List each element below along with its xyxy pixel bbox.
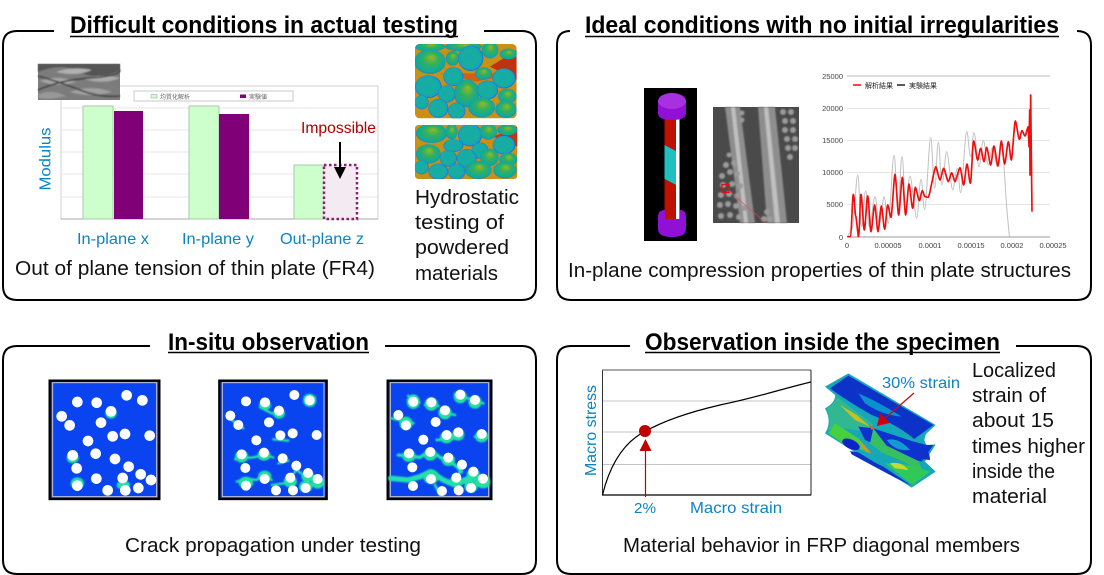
line chart: analysis vs experiment: 0.00005 bbox=[874, 241, 902, 250]
panel 3 frame bbox=[3, 346, 536, 574]
line chart: analysis vs experiment: 10000 bbox=[822, 168, 843, 177]
line chart: analysis vs experiment: 0.00015 bbox=[957, 241, 985, 250]
line chart: analysis vs experiment: 0.0002 bbox=[1001, 241, 1023, 250]
bar chart: modulus bbox=[61, 86, 378, 219]
stress-strain chart bbox=[602, 370, 811, 497]
bar chart: modulus: 実験値 bbox=[249, 93, 267, 101]
simulation frame: mid stage bbox=[219, 381, 327, 499]
line chart: analysis vs experiment: 5000 bbox=[826, 200, 843, 209]
text: localized strain note: times higher bbox=[972, 436, 1085, 458]
panel 2 frame bbox=[557, 31, 1091, 300]
text: hydrostatic testing of powdered materials: materials bbox=[415, 263, 498, 285]
category labels: In-plane y bbox=[182, 231, 254, 248]
axis label: Macro strain: Macro strain bbox=[690, 500, 782, 517]
simulation frame: early stage bbox=[50, 381, 159, 499]
bar chart: modulus: 均質化解析 bbox=[160, 93, 190, 101]
category labels: In-plane x bbox=[77, 231, 149, 248]
text: hydrostatic testing of powdered materials bbox=[415, 187, 519, 285]
axis label: Macro stress: Macro stress bbox=[583, 385, 600, 476]
line chart: analysis vs experiment: 実験結果 bbox=[909, 81, 937, 90]
panel 2 heading: Ideal conditions with no initial irregularities bbox=[585, 12, 1059, 39]
text: localized strain note: Localized bbox=[972, 360, 1056, 382]
text: hydrostatic testing of powdered materials: Hydrostatic bbox=[415, 187, 519, 209]
line chart: analysis vs experiment: 20000 bbox=[822, 104, 843, 113]
panel: in-situ observation bbox=[3, 329, 536, 574]
text: localized strain note: about 15 bbox=[972, 410, 1054, 432]
line chart: analysis vs experiment: 0 bbox=[839, 233, 843, 242]
simulation frame: late stage bbox=[388, 381, 491, 499]
callout text: 30% strain: 30% strain bbox=[882, 375, 960, 392]
caption: FRP diagonal members: Material behavior in FRP diagonal members bbox=[623, 535, 1020, 557]
line chart: analysis vs experiment: 0.00025 bbox=[1039, 241, 1067, 250]
text: hydrostatic testing of powdered materials: powdered bbox=[415, 237, 509, 259]
panel 1 frame bbox=[3, 31, 536, 300]
panel: observation inside the specimen bbox=[557, 329, 1091, 574]
photo: woven fabric bbox=[38, 64, 120, 100]
micrograph: fibre cross section bbox=[713, 107, 799, 223]
text: localized strain note: strain of bbox=[972, 385, 1046, 407]
arrow: to missing bar bbox=[334, 142, 346, 179]
panel 3 heading: In-situ observation bbox=[168, 329, 369, 356]
line chart: analysis vs experiment: 解析結果 bbox=[865, 81, 893, 90]
FE model: diagonal member strain bbox=[825, 373, 936, 488]
line chart: analysis vs experiment: 25000 bbox=[822, 72, 843, 81]
text: localized strain note: inside the bbox=[972, 461, 1055, 483]
image: powder simulation before compression bbox=[414, 42, 517, 119]
callout arrow: 30% strain bbox=[877, 393, 914, 426]
caption: in-plane compression: In-plane compression properties of thin plate structures bbox=[568, 260, 1071, 282]
category labels bbox=[77, 231, 364, 248]
panel: difficult conditions in actual testing bbox=[3, 12, 536, 300]
axis label: Modulus: Modulus bbox=[38, 128, 54, 190]
marker: 2% strain point bbox=[639, 425, 652, 497]
panel 4 frame bbox=[557, 346, 1091, 574]
panel 1 heading: Difficult conditions in actual testing bbox=[70, 12, 458, 39]
panel: ideal conditions with no initial irregularities bbox=[557, 12, 1091, 300]
text: localized strain note: material bbox=[972, 486, 1047, 508]
category labels: Out-plane z bbox=[280, 231, 364, 248]
caption: crack propagation: Crack propagation under testing bbox=[125, 535, 421, 557]
image: powder simulation after compression bbox=[415, 124, 517, 180]
dotted box: impossible measurement bbox=[324, 165, 357, 219]
axis label: 2%: 2% bbox=[634, 500, 656, 517]
text: hydrostatic testing of powdered materials: testing of bbox=[415, 212, 504, 234]
line chart: analysis vs experiment: 0.0001 bbox=[919, 241, 941, 250]
text: localized strain note bbox=[972, 360, 1085, 508]
line chart: analysis vs experiment: 0 bbox=[845, 241, 849, 250]
specimen model bbox=[644, 88, 697, 241]
line chart: analysis vs experiment bbox=[822, 72, 1067, 250]
line chart: analysis vs experiment: 15000 bbox=[822, 136, 843, 145]
panel 4 heading: Observation inside the specimen bbox=[645, 329, 1000, 356]
label: Impossible: Impossible bbox=[301, 120, 376, 137]
caption: out of plane tension: Out of plane tension of thin plate (FR4) bbox=[15, 258, 375, 280]
